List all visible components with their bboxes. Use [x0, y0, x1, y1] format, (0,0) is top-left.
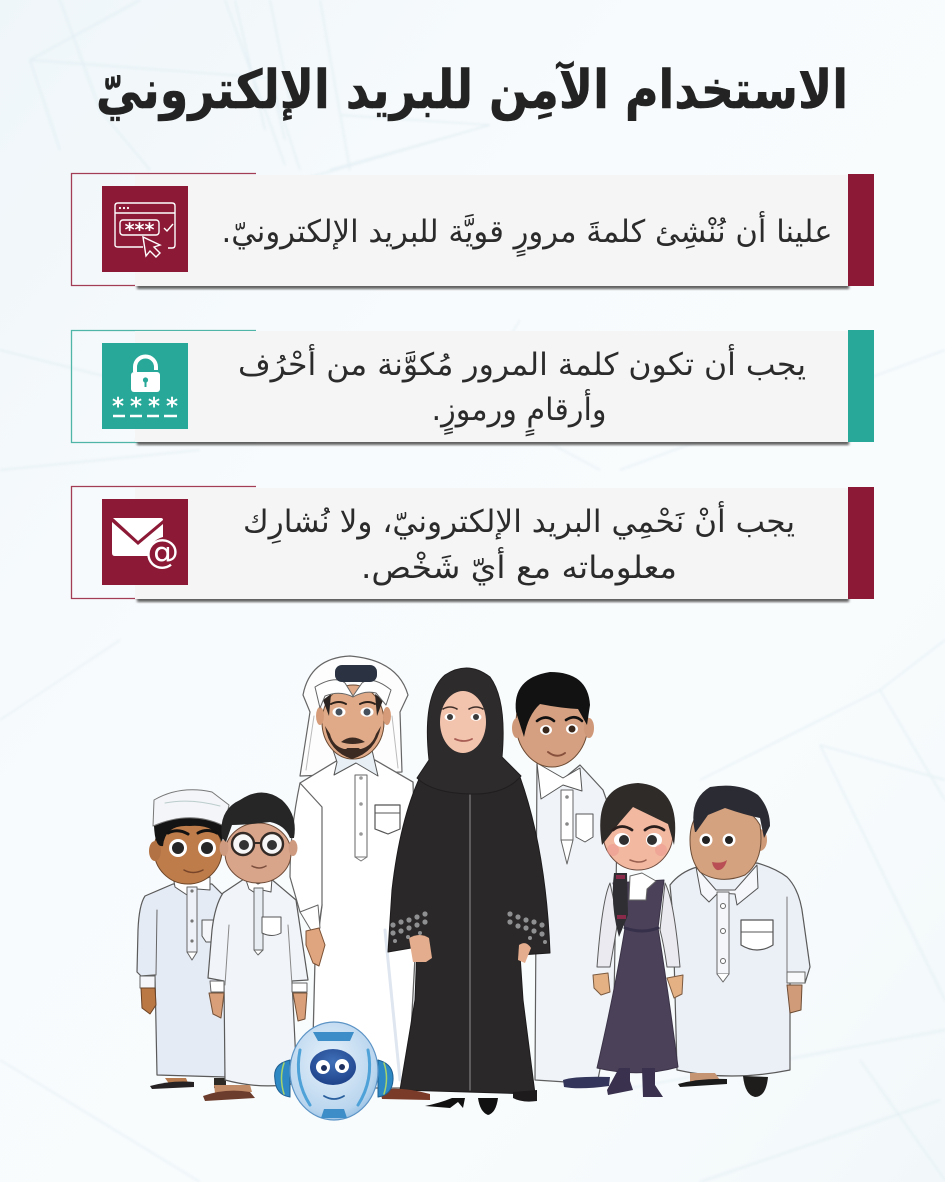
card 2 text: [238, 344, 806, 437]
panel: card 1 strong password: [72, 174, 874, 289]
panel: card 3 protect email: [72, 486, 874, 602]
card 2 shadow: [137, 439, 849, 445]
card 3 accent bar: [848, 487, 874, 599]
card 2 text: وأرقامٍ ورموزٍ.: [432, 389, 606, 437]
card 3 text: معلوماته مع أيّ شَخْص.: [361, 547, 677, 586]
card 1 text: علينا أن نُنْشِئ كلمةَ مرورٍ قويَّة للبريد الإلكترونيّ.: [222, 211, 832, 258]
card 3 text: [243, 501, 795, 586]
card 2 text: يجب أن تكون كلمة المرور مُكوَّنة من أحْرُف: [238, 344, 806, 383]
icon: envelope with at sign: [102, 499, 188, 585]
card 2 frame: [72, 330, 256, 442]
card 3 background: [135, 488, 849, 599]
icon: password window: ***: [125, 219, 154, 241]
card 2 accent bar: [848, 330, 874, 442]
character: large boy: [670, 786, 810, 1097]
card 1 background: [135, 175, 849, 286]
icon: envelope with at sign: @: [145, 532, 179, 572]
card 3 text: يجب أنْ نَحْمِي البريد الإلكترونيّ، ولا نُشارِك: [243, 501, 795, 545]
character: woman in abaya: [380, 668, 550, 1115]
card 3 frame: [72, 486, 256, 598]
icon: padlock and asterisks: [102, 343, 188, 429]
card 1 shadow: [137, 283, 849, 289]
character: boy with glasses: [203, 792, 308, 1101]
character: boy in cap: [137, 790, 229, 1090]
icon: password window: [102, 186, 188, 272]
panel: card 2 password composition: [72, 330, 874, 445]
card 1 frame: [72, 174, 256, 286]
card 3 shadow: [137, 596, 849, 602]
illustration: family group: [137, 656, 810, 1120]
card 2 background: [135, 331, 849, 442]
card 1 accent bar: [848, 174, 874, 286]
title: الاستخدام الآمِن للبريد الإلكترونيّ: [96, 60, 848, 121]
character: robot mascot: [275, 1022, 393, 1120]
icon: padlock and asterisks: ****: [112, 394, 178, 420]
character: girl in pinafore: [593, 783, 683, 1097]
character: young man: [512, 672, 617, 1088]
character: man in ghutra: [290, 656, 417, 1088]
